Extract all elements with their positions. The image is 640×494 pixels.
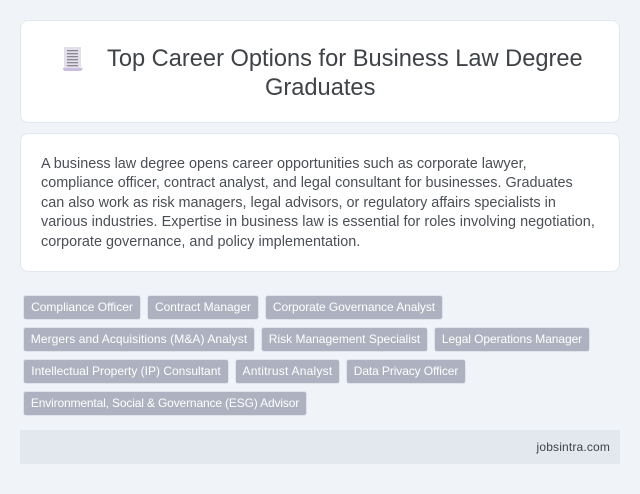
footer bar [20, 430, 620, 464]
tag: Intellectual Property Consultant [23, 359, 229, 384]
tag: Data Privacy Officer [346, 359, 466, 384]
tag: Compliance Officer: Compliance Officer [31, 300, 133, 314]
tag: Risk Management Specialist [261, 327, 428, 352]
description text: compliance officer, contract analyst, and legal consultant for businesses. Graduates [41, 175, 573, 191]
tag: Intellectual Property Consultant: Intellectual Property (IP) Consultant [31, 364, 221, 378]
tag: Corporate Governance Analyst [265, 295, 443, 320]
description text: A business law degree opens career opportunities such as corporate lawyer, [41, 156, 527, 172]
panel: description card [20, 133, 620, 272]
title second line: Graduates [265, 75, 375, 101]
tag: Legal Operations Manager [434, 327, 590, 352]
tag: Mergers and Acquisitions Analyst: Mergers and Acquisitions (M&A) Analyst [31, 332, 247, 346]
description text [41, 156, 595, 250]
tag: Risk Management Specialist: Risk Management Specialist [269, 332, 420, 346]
tag: Data Privacy Officer: Data Privacy Officer [354, 364, 458, 378]
tag: ESG Advisor: Environmental, Social & Governance (ESG) Advisor [31, 396, 299, 410]
tag: Mergers and Acquisitions Analyst [23, 327, 255, 352]
panel: title card [20, 20, 620, 123]
tag: Antitrust Analyst [235, 359, 340, 384]
tag: Compliance Officer [23, 295, 141, 320]
title: Top Career Options for Business Law Degree [107, 46, 583, 72]
tag: ESG Advisor [23, 391, 307, 416]
icon: document scroll [63, 47, 83, 71]
tag: Antitrust Analyst: Antitrust Analyst [243, 364, 332, 378]
description text: various industries. Expertise in business law is essential for roles involving negotiation, [41, 214, 595, 230]
tag: Corporate Governance Analyst: Corporate Governance Analyst [273, 300, 435, 314]
footer source link text: jobsintra.com [537, 440, 610, 454]
tag: Contract Manager: Contract Manager [155, 300, 251, 314]
tag: Contract Manager [147, 295, 259, 320]
description text: corporate governance, and policy implementation. [41, 234, 360, 250]
tag: Legal Operations Manager: Legal Operations Manager [442, 332, 582, 346]
description text: can also work as risk managers, legal advisors, or regulatory affairs specialists in [41, 195, 556, 211]
